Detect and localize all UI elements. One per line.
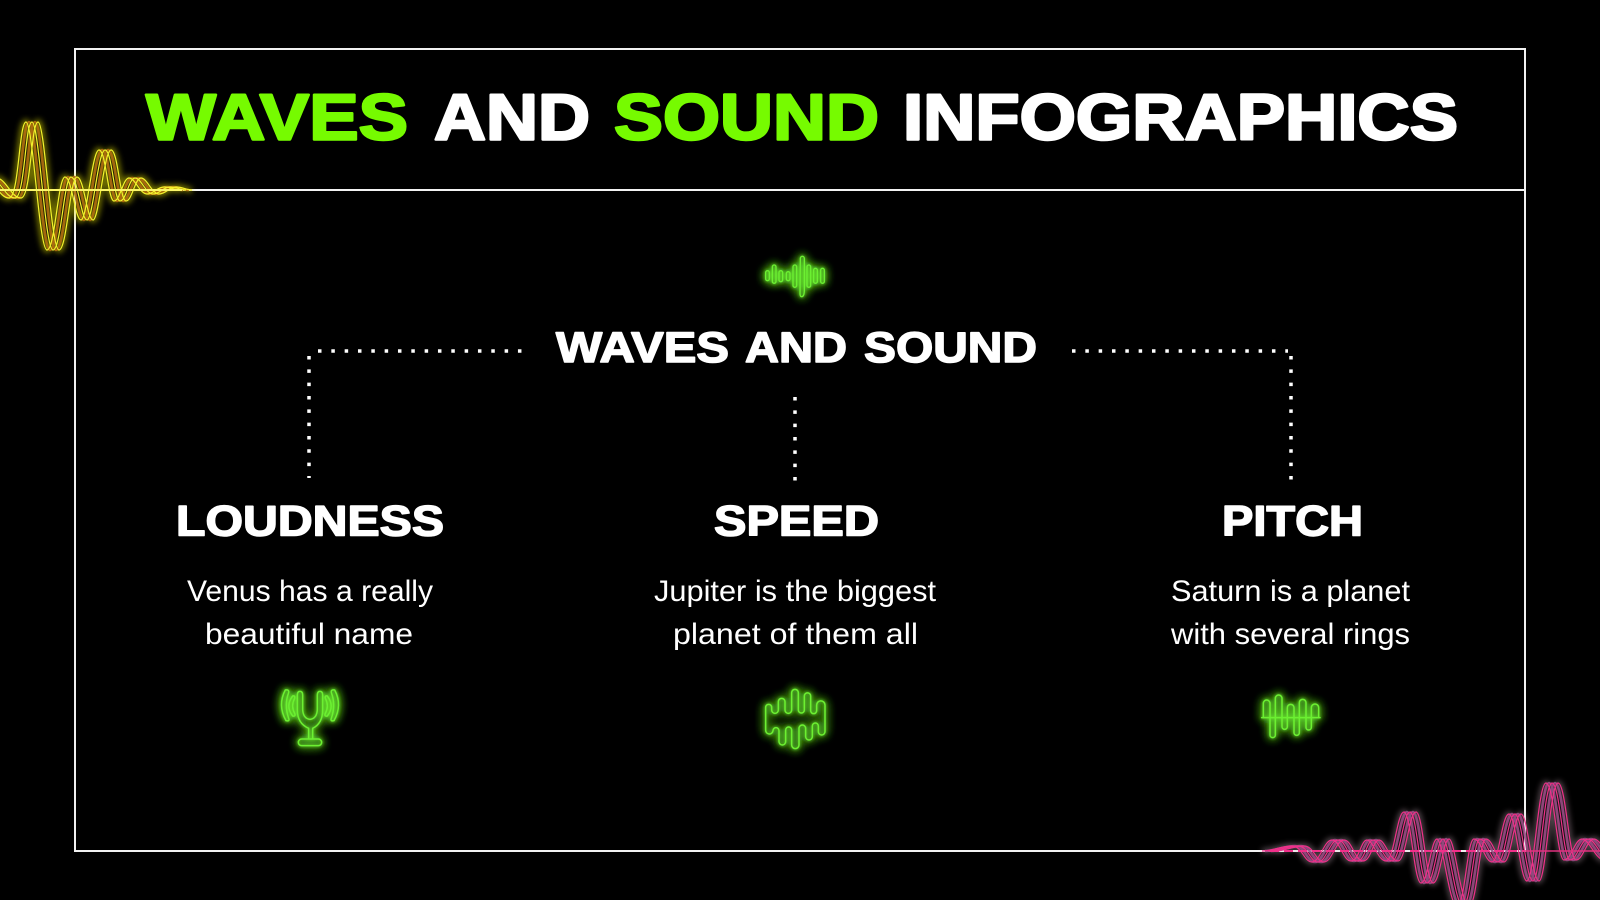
title: WAVES	[146, 80, 408, 154]
icon: wave on axis	[1262, 695, 1320, 738]
heading: speed: SPEED	[714, 498, 879, 546]
title: INFOGRAPHICS	[903, 80, 1458, 154]
dotted connectors	[309, 351, 1291, 482]
main heading: WAVES	[556, 324, 729, 372]
text: speed description: Jupiter is the biggest	[654, 575, 937, 608]
text: loudness description: Venus has a really	[187, 575, 433, 608]
title: AND	[434, 80, 590, 154]
main heading	[556, 324, 1037, 372]
text: loudness description: beautiful name	[205, 618, 413, 651]
column: speed	[654, 498, 937, 749]
title: SOUND	[614, 80, 879, 154]
heading: pitch: PITCH	[1222, 498, 1363, 546]
icon: sound wave bars	[766, 256, 824, 297]
main heading: AND	[745, 324, 847, 372]
text: speed description: planet of them all	[673, 618, 918, 651]
text: speed description	[654, 575, 937, 651]
icon: closed wave band	[766, 689, 825, 749]
title	[146, 80, 1458, 154]
text: pitch description: with several rings	[1170, 618, 1410, 651]
main heading: SOUND	[864, 324, 1037, 372]
icon: tuning fork	[281, 690, 338, 746]
yellow sound wave	[0, 122, 192, 250]
heading: loudness: LOUDNESS	[176, 498, 444, 546]
column: loudness	[176, 498, 444, 746]
text: pitch description	[1170, 575, 1411, 651]
text: pitch description: Saturn is a planet	[1171, 575, 1411, 608]
column: pitch	[1170, 498, 1411, 738]
pink sound wave	[1262, 783, 1600, 900]
text: loudness description	[187, 575, 433, 651]
